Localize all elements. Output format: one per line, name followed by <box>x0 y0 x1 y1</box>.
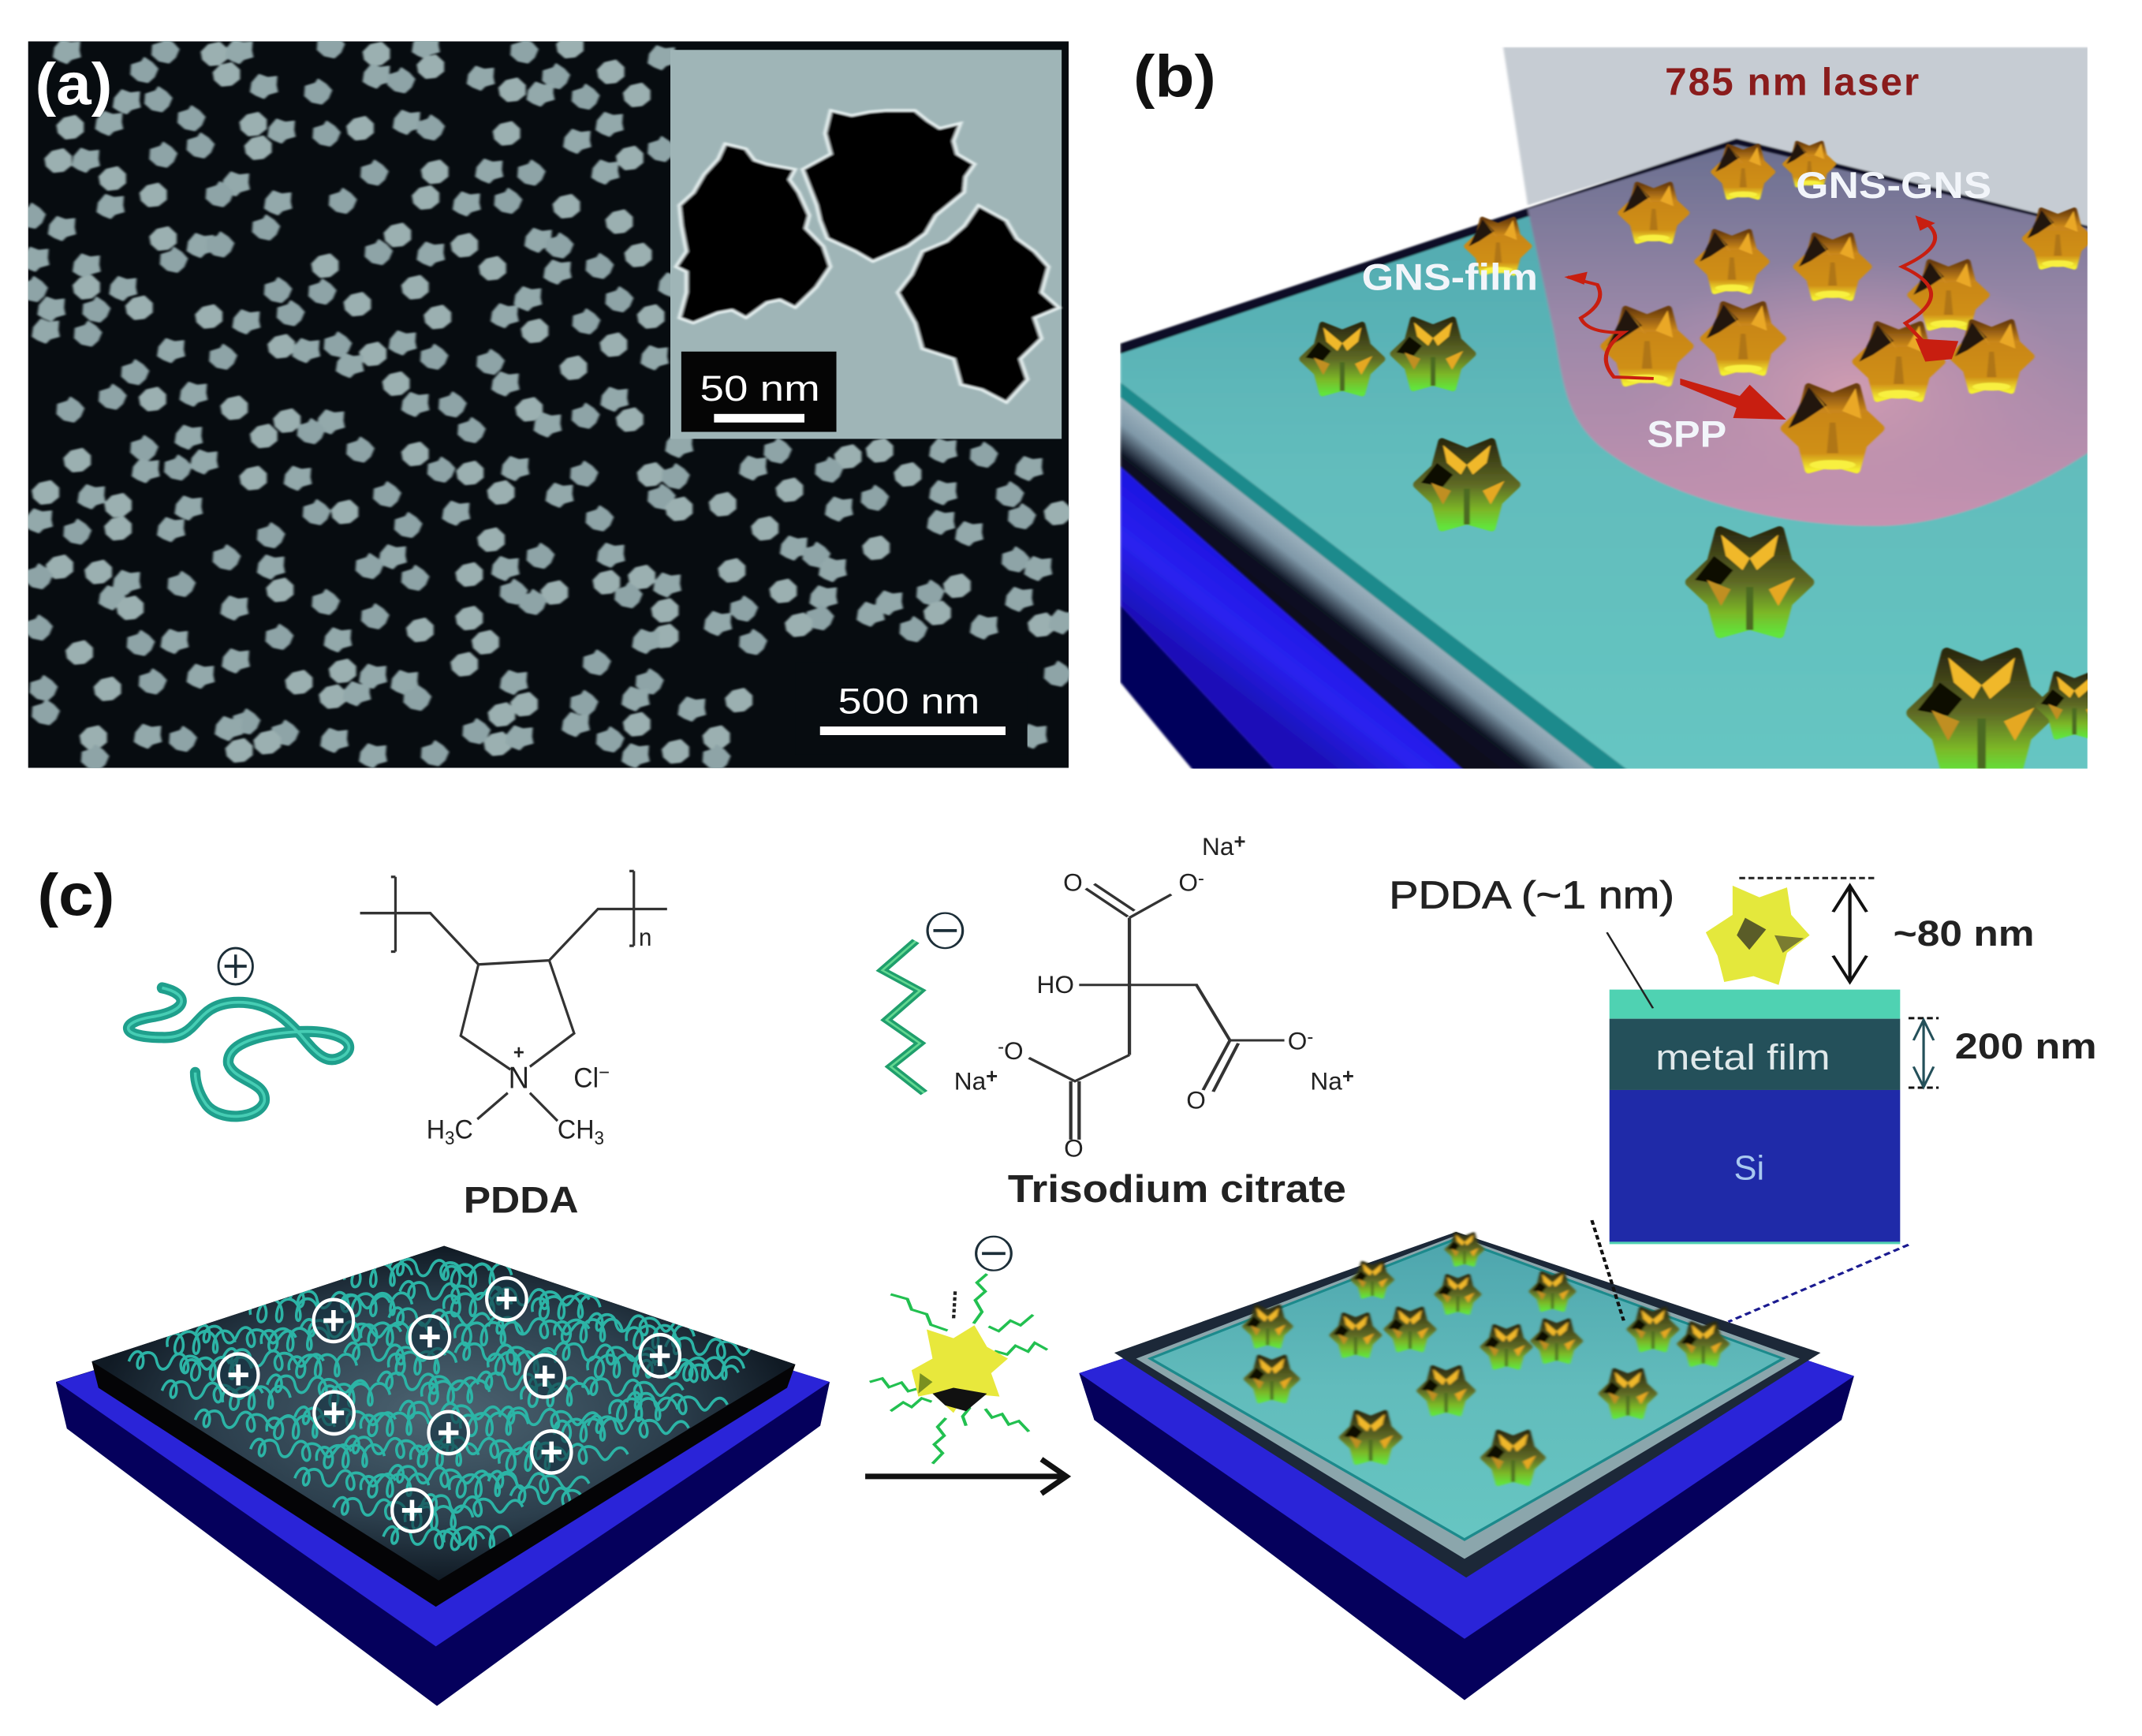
trisodium citrate atom labels: O <box>1288 1026 1307 1055</box>
panel c right: citrate structure, cross-section and nanostar substrate <box>865 831 2097 1701</box>
trisodium citrate atom labels: O <box>1064 1134 1084 1163</box>
panel label (c): (c) <box>37 861 114 928</box>
label: metal film: metal film <box>1655 1037 1830 1077</box>
chemical structure of PDDA: N <box>509 1061 529 1095</box>
icon: PDDA polymer strand with positive charge <box>129 948 349 1116</box>
panel label (a): (a) <box>35 50 112 117</box>
substrate with nanostars <box>1079 1232 1854 1701</box>
trisodium citrate atom labels: O <box>1178 868 1198 897</box>
trisodium citrate atom labels: + <box>1342 1066 1354 1088</box>
label: PDDA: PDDA <box>464 1178 579 1221</box>
chemical structure of PDDA: − <box>599 1062 610 1084</box>
chemical structure of PDDA: + <box>513 1042 524 1064</box>
citrate ligand strand icon <box>883 913 963 1093</box>
label: SPP: SPP <box>1647 413 1726 455</box>
label: Trisodium citrate: Trisodium citrate <box>1008 1167 1346 1211</box>
red wavy and SPP arrows <box>1564 215 1958 420</box>
trisodium citrate atom labels: HO <box>1037 970 1074 999</box>
trisodium citrate atom labels: O <box>1186 1085 1206 1114</box>
trisodium citrate atom labels: + <box>1233 831 1245 853</box>
citrate-capped nanostar with ligands <box>870 1237 1047 1464</box>
trisodium citrate atom labels: - <box>1307 1027 1313 1047</box>
trisodium citrate atom labels: Na <box>1310 1067 1342 1096</box>
trisodium citrate atom labels <box>954 831 1354 1163</box>
label: 200 nm: 200 nm <box>1955 1026 2097 1066</box>
chemical structure of PDDA: 3 <box>595 1127 604 1148</box>
trisodium citrate atom labels: O <box>1004 1036 1024 1065</box>
panel label (b): (b) <box>1133 43 1216 110</box>
trisodium citrate atom labels: + <box>986 1066 998 1088</box>
panel b: 3D schematic of nanostars under 785 nm laser <box>1121 47 2110 775</box>
scale bar box: 500 nm: 500 nm <box>838 681 980 721</box>
nanoparticles scattered on the SEM image <box>18 33 1077 770</box>
nanostar blobs in TEM inset <box>676 110 1059 402</box>
panel a: SEM micrograph of gold nanostars <box>18 33 1077 770</box>
chemical structure of PDDA: H <box>427 1115 445 1145</box>
green-based nanostars on teal film <box>1303 319 2110 773</box>
panel c left: PDDA polymer and coated substrate <box>56 871 830 1706</box>
trisodium citrate bonds <box>1029 884 1285 1140</box>
chemical structure of PDDA: 3 <box>445 1127 454 1148</box>
trisodium citrate atom labels: - <box>998 1037 1004 1058</box>
trisodium citrate atom labels: - <box>1198 869 1204 890</box>
positive charge markers <box>218 1278 680 1532</box>
scale bar box: 50 nm <box>681 352 837 432</box>
PDDA squiggle network <box>129 1258 766 1550</box>
trisodium citrate atom labels: Na <box>954 1067 986 1096</box>
chemical structure of PDDA: C <box>454 1115 473 1145</box>
label: 785 nm laser: 785 nm laser <box>1665 61 1919 104</box>
scale bar box: 500 nm <box>820 688 1028 748</box>
reaction arrow <box>865 1459 1066 1494</box>
label: ~80 nm: ~80 nm <box>1894 913 2035 954</box>
scale bar box: 50 nm: 50 nm <box>700 368 820 409</box>
trisodium citrate atom labels: Na <box>1202 832 1233 861</box>
label: GNS-GNS: GNS-GNS <box>1796 165 1991 207</box>
substrate and film layers <box>1121 47 2098 775</box>
chemical structure of PDDA: Cl <box>573 1062 599 1093</box>
cross-section of layered substrate <box>1592 878 1939 1322</box>
chemical structure of PDDA <box>360 871 667 1148</box>
label: GNS-film: GNS-film <box>1362 257 1538 299</box>
substrate coated with PDDA <box>56 1246 830 1706</box>
label: Si: Si <box>1734 1149 1764 1187</box>
inset: TEM image of three nanostars <box>670 50 1062 439</box>
trisodium citrate atom labels: O <box>1063 868 1083 897</box>
chemical structure of PDDA: CH <box>558 1115 595 1145</box>
label: PDDA (~1 nm): PDDA (~1 nm) <box>1389 873 1674 917</box>
chemical structure of PDDA: n <box>639 924 651 951</box>
gold nanostars in laser spot <box>1466 143 2091 469</box>
small nanostars on film <box>1245 1234 1728 1484</box>
